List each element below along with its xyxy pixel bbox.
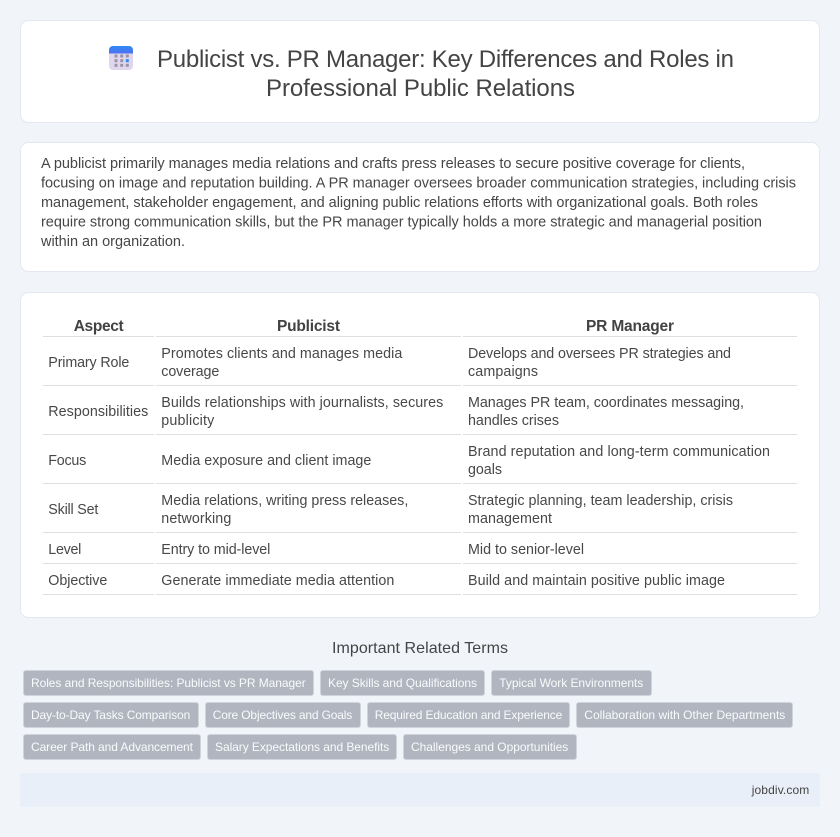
- summary text: focusing on image and reputation building. A PR manager oversees broader communication strategies, including crisis: [41, 176, 796, 192]
- summary text: within an organization.: [40, 234, 185, 250]
- tag list: related terms: Collaboration with Other Departments: [584, 708, 785, 722]
- table row: Level: Mid to senior-level: [468, 542, 584, 558]
- table row: Focus: Brand reputation and long-term communication: [468, 444, 770, 460]
- table row: Primary Role: campaigns: [468, 364, 538, 380]
- title: Professional Public Relations: [266, 75, 575, 102]
- title: Publicist vs. PR Manager: Key Differences and Roles in: [157, 46, 734, 73]
- table row: Primary Role: Develops and oversees PR strategies and: [468, 346, 731, 362]
- tag list: related terms: Key Skills and Qualifications: [328, 676, 477, 690]
- table row: Focus: Media exposure and client image: [161, 453, 371, 469]
- table row: Primary Role: [43, 346, 797, 386]
- icon: calendar: [109, 46, 133, 70]
- table header row: PR Manager: [586, 318, 674, 335]
- footer bar: [20, 773, 820, 807]
- table row: Focus: Focus: [48, 453, 86, 469]
- table row: Objective: [43, 573, 797, 595]
- table row: Focus: goals: [468, 462, 502, 478]
- tag list: related terms: Salary Expectations and Benefits: [215, 740, 389, 754]
- table row: Objective: Build and maintain positive public image: [468, 573, 725, 589]
- table row: Responsibilities: handles crises: [468, 413, 559, 429]
- table row: Skill Set: Strategic planning, team leadership, crisis: [468, 493, 733, 509]
- table row: Objective: Objective: [48, 573, 107, 589]
- tag list: related terms: Core Objectives and Goals: [213, 708, 352, 722]
- tag list: related terms: Career Path and Advancement: [31, 740, 194, 754]
- table row: Skill Set: Media relations, writing press releases,: [161, 493, 408, 509]
- table header row: [43, 318, 797, 337]
- table row: Skill Set: Skill Set: [48, 502, 98, 518]
- table row: Focus: [43, 444, 797, 484]
- table row: Level: [43, 542, 797, 564]
- table row: Responsibilities: Manages PR team, coordinates messaging,: [468, 395, 744, 411]
- table header row: Publicist: [277, 318, 340, 335]
- table row: Primary Role: Primary Role: [48, 355, 129, 371]
- panel: comparison table: [20, 292, 820, 618]
- tag list: related terms: Required Education and Experience: [375, 708, 563, 722]
- heading: related terms: Important Related Terms: [332, 640, 508, 657]
- tag list: related terms: Roles and Responsibilities: Publicist vs PR Manager: [31, 676, 306, 690]
- table row: Skill Set: [43, 493, 797, 533]
- table row: Primary Role: Promotes clients and manages media: [161, 346, 402, 362]
- table row: Skill Set: management: [468, 511, 552, 527]
- table row: Level: Level: [48, 542, 81, 558]
- table row: Responsibilities: Builds relationships with journalists, secures: [161, 395, 443, 411]
- table row: Primary Role: coverage: [161, 364, 219, 380]
- summary text: management, stakeholder engagement, and aligning public relations efforts with organizational goals. Both roles: [41, 195, 758, 211]
- table row: Skill Set: networking: [161, 511, 231, 527]
- table row: Responsibilities: [43, 395, 797, 435]
- panel: summary: [20, 142, 820, 272]
- title: [157, 46, 734, 102]
- summary text: require strong communication skills, but the PR manager typically holds a more strategic and managerial position: [41, 214, 762, 230]
- table row: Level: Entry to mid-level: [161, 542, 270, 558]
- tag list: related terms: Day-to-Day Tasks Comparison: [31, 708, 190, 722]
- table row: Responsibilities: Responsibilities: [48, 404, 148, 420]
- tag list: related terms: Typical Work Environments: [499, 676, 643, 690]
- footer site name: jobdiv.com: [751, 783, 809, 797]
- table header row: Aspect: [74, 318, 124, 335]
- tag list: related terms: [24, 670, 792, 760]
- tag list: related terms: Challenges and Opportunities: [411, 740, 568, 754]
- summary text: [40, 156, 796, 250]
- table row: Responsibilities: publicity: [161, 413, 215, 429]
- panel: title header: [20, 20, 820, 122]
- summary text: A publicist primarily manages media relations and crafts press releases to secure positive coverage for clients,: [41, 156, 745, 172]
- table row: Objective: Generate immediate media attention: [161, 573, 394, 589]
